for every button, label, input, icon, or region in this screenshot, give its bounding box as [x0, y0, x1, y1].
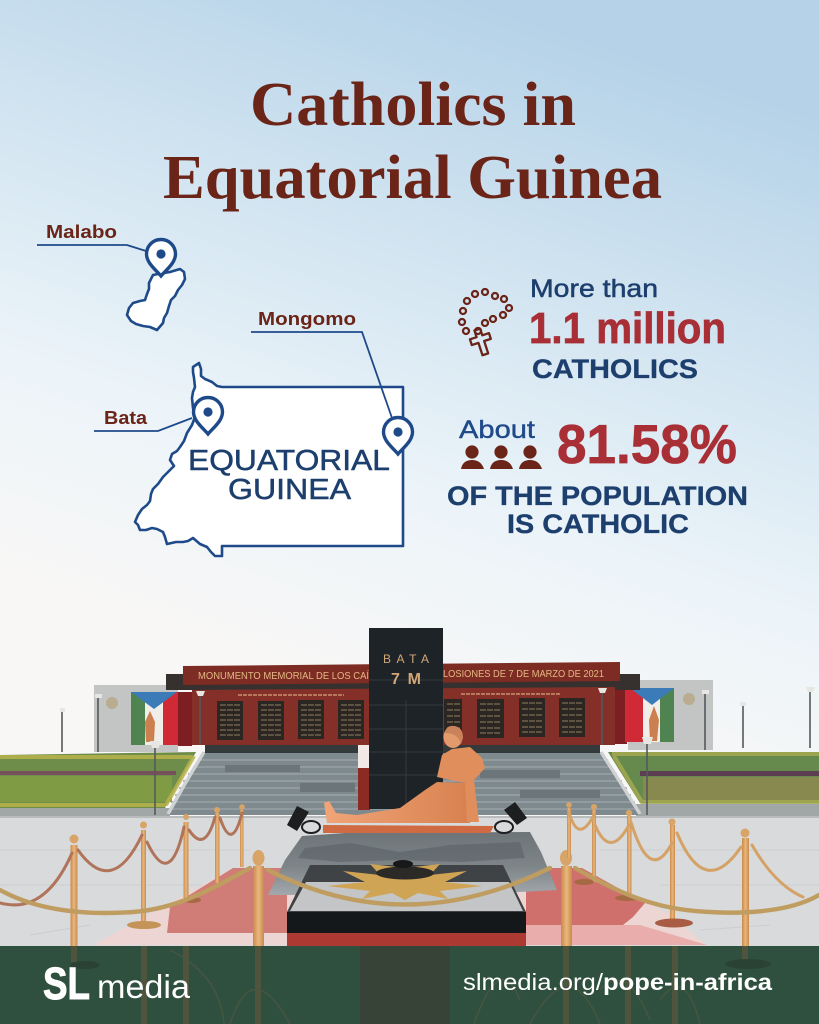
text: of the population is catholic [447, 481, 748, 539]
logo: SL media: media [97, 968, 191, 1005]
footer: reflections in floor [70, 946, 771, 1024]
text: More than: More than [530, 275, 658, 303]
map: Bioko island [127, 269, 185, 330]
map: mainland [135, 363, 403, 556]
photo: spotlights [287, 802, 527, 833]
footer url: slmedia.org/ [463, 969, 604, 995]
photo: low walls [0, 804, 819, 817]
photo: Bata 7M memorial [0, 628, 819, 946]
footer url [463, 969, 772, 995]
text: About: About [459, 416, 535, 444]
photo: rock plinth [268, 832, 557, 895]
leader line: Mongomo [251, 332, 392, 418]
photo: golden star and eternal flame [327, 860, 482, 900]
photo: staircase [168, 752, 640, 815]
label: Malabo: Malabo [46, 222, 117, 242]
photo: memorial wall: LOSIONES DE 7 DE MARZO DE 2021 [443, 668, 604, 680]
icon: pin Mongomo [384, 418, 412, 454]
icon: pin Bata [194, 398, 222, 434]
title: Equatorial Guinea [163, 144, 662, 212]
logo: SL media: SL [43, 958, 90, 1009]
title: Catholics in [250, 71, 576, 139]
photo: memorial wall: MONUMENTO MEMORIAL DE LOS CAÍ [198, 669, 369, 682]
photo: tower: 7 M [391, 671, 421, 688]
photo: rope barrier ropes [0, 812, 819, 913]
map label: Equatorial Guinea [188, 445, 390, 506]
label: Mongomo: Mongomo [258, 309, 356, 329]
label: Bata: Bata [104, 408, 148, 428]
text: 81.58%: 81.58% [557, 413, 737, 475]
logo: SL media [43, 958, 191, 1009]
photo: tower: BATA [383, 652, 429, 666]
photo: plaza floor [0, 816, 819, 946]
leader line: Malabo [37, 245, 146, 251]
photo: left wing building [94, 685, 192, 752]
panel: population share [447, 413, 748, 539]
text: Catholics: CATHOLICS [532, 354, 698, 384]
title [163, 71, 662, 212]
footer bar [0, 946, 819, 1024]
leader line: Bata [94, 418, 192, 431]
icon: pin Malabo [146, 240, 176, 276]
text: of the population is catholic: IS CATHOLIC [507, 509, 689, 539]
text: of the population is catholic: OF THE POPULATION [447, 481, 748, 511]
photo: tower [358, 628, 443, 810]
icon: rosary [459, 289, 512, 357]
photo: lamp posts [60, 687, 815, 815]
icon: three people [461, 445, 542, 469]
photo: lawn right [608, 752, 819, 803]
photo: right wing building [615, 680, 713, 750]
panel: Catholic count [459, 275, 726, 384]
panel: map of Equatorial Guinea [37, 222, 412, 556]
map label: Equatorial Guinea: EQUATORIAL [188, 445, 390, 477]
photo: pale red floor reflection [93, 868, 707, 946]
map label: Equatorial Guinea: GUINEA [228, 474, 352, 506]
photo: rope barrier posts [70, 802, 750, 946]
photo: statue [323, 726, 494, 833]
photo: memorial wall [166, 662, 640, 753]
footer url: pope-in-africa [603, 969, 772, 995]
photo: lawn left [0, 752, 196, 808]
photo: black pedestal [287, 865, 526, 933]
text: 1.1 million: 1.1 million [529, 304, 726, 353]
